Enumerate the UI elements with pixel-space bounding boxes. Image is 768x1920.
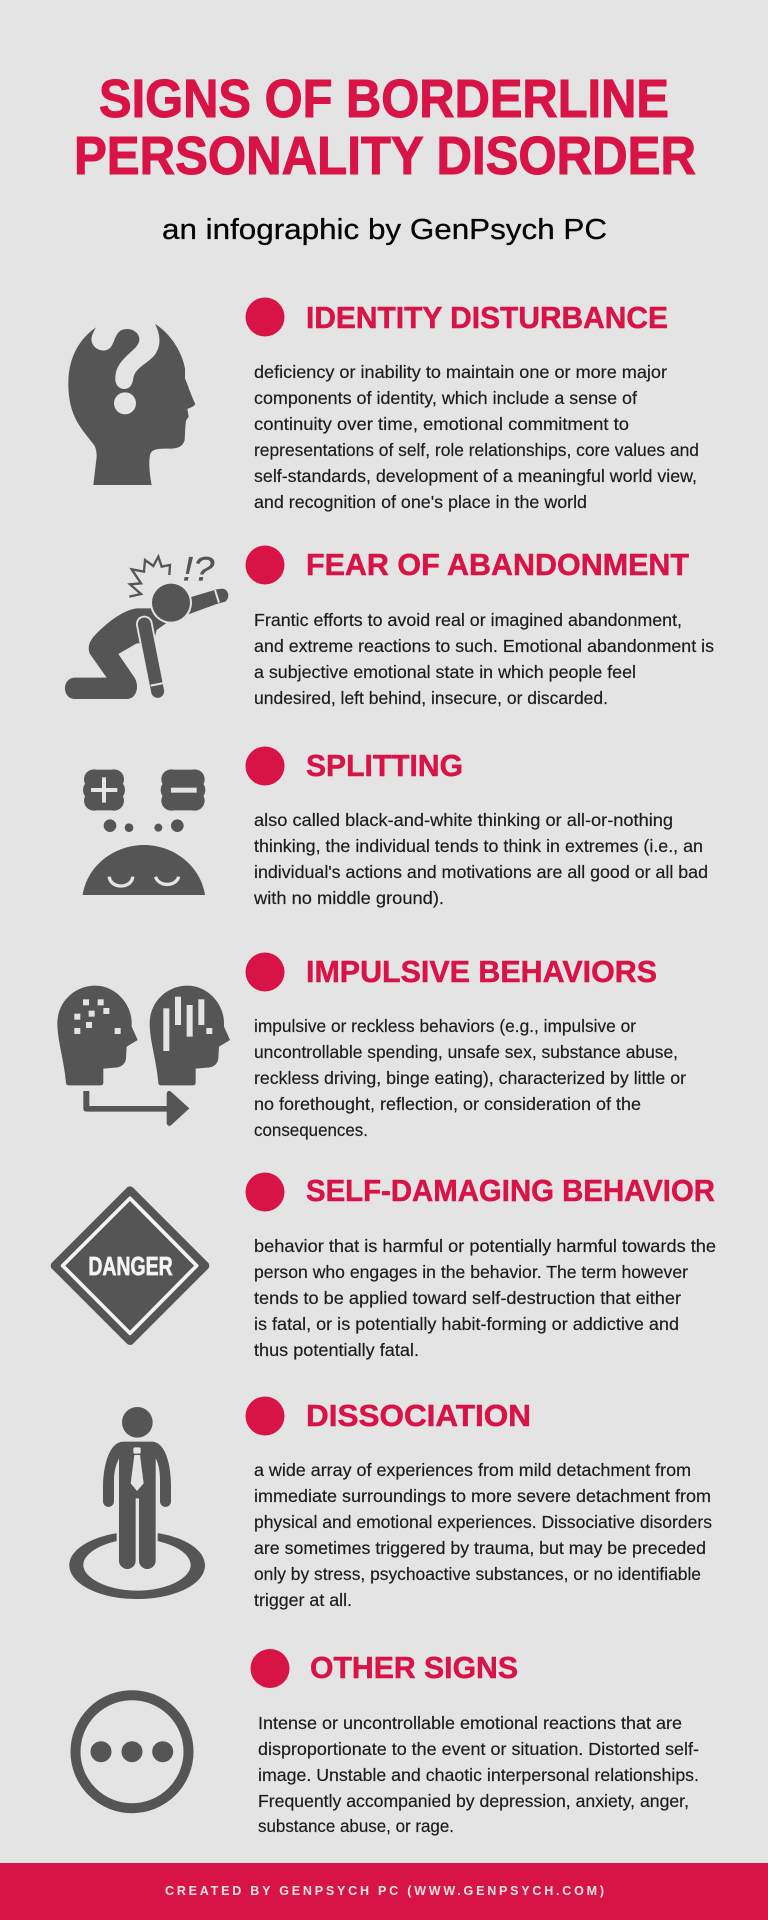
body text: physical and emotional experiences. Dissociative disorders xyxy=(254,1512,712,1532)
icon: kneeling figure: !? xyxy=(183,551,215,589)
body text xyxy=(254,610,714,708)
body text: behavior that is harmful or potentially harmful towards the xyxy=(254,1236,716,1256)
body text: Intense or uncontrollable emotional reactions that are xyxy=(258,1713,682,1733)
body text: immediate surroundings to more severe detachment from xyxy=(254,1486,711,1506)
body text: only by stress, psychoactive substances, or no identifiable xyxy=(254,1564,701,1584)
panel: dissociation xyxy=(69,1396,712,1610)
circle bullet xyxy=(246,1396,284,1436)
panel: impulsive behaviors xyxy=(57,952,686,1140)
body text: impulsive or reckless behaviors (e.g., impulsive or xyxy=(254,1016,636,1036)
icon: head with question mark xyxy=(68,324,195,485)
title xyxy=(74,70,696,186)
icon: danger sign: DANGER xyxy=(88,1251,173,1281)
panel: splitting xyxy=(83,746,708,908)
footer band xyxy=(0,1863,768,1920)
icon: kneeling figure xyxy=(65,551,228,699)
body text: thinking, the individual tends to think in extremes (i.e., an xyxy=(254,836,703,856)
heading: IDENTITY DISTURBANCE xyxy=(306,300,668,335)
heading: SELF-DAMAGING BEHAVIOR xyxy=(306,1173,715,1208)
body text xyxy=(254,1016,686,1140)
circle bullet xyxy=(246,746,284,786)
body text: are sometimes triggered by trauma, but may be preceded xyxy=(254,1538,706,1558)
title: SIGNS OF BORDERLINE xyxy=(99,70,669,129)
icon: danger sign xyxy=(55,1191,205,1341)
circle bullet xyxy=(250,1649,290,1688)
panel: self-damaging behavior xyxy=(55,1172,716,1360)
body text xyxy=(258,1713,699,1836)
icon: plus and minus thoughts over a sleeping head xyxy=(83,769,205,895)
heading: FEAR OF ABANDONMENT xyxy=(306,547,689,582)
body text: tends to be applied toward self-destruction that either xyxy=(254,1288,681,1308)
body text: disproportionate to the event or situation. Distorted self- xyxy=(258,1739,699,1759)
icon: two heads with arrow xyxy=(57,986,230,1126)
body text: thus potentially fatal. xyxy=(254,1340,419,1360)
body text: individual's actions and motivations are all good or all bad xyxy=(254,862,708,882)
icon: circle with three dots xyxy=(76,1695,188,1808)
body text: is fatal, or is potentially habit-forming or addictive and xyxy=(254,1314,679,1334)
heading: OTHER SIGNS xyxy=(310,1650,518,1685)
title: PERSONALITY DISORDER xyxy=(74,127,696,186)
body text: Frantic efforts to avoid real or imagined abandonment, xyxy=(254,610,682,630)
body text xyxy=(254,1460,712,1610)
body text: components of identity, which include a sense of xyxy=(254,388,637,408)
panel: other signs xyxy=(76,1649,699,1836)
body text: image. Unstable and chaotic interpersonal relationships. xyxy=(258,1765,699,1785)
body text: no forethought, reflection, or consideration of the xyxy=(254,1094,641,1114)
body text: deficiency or inability to maintain one or more major xyxy=(254,362,667,382)
body text: substance abuse, or rage. xyxy=(258,1816,454,1836)
footer credit: CREATED BY GENPSYCH PC (WWW.GENPSYCH.COM) xyxy=(165,1884,604,1898)
heading: DISSOCIATION xyxy=(306,1398,531,1433)
body text: a subjective emotional state in which people feel xyxy=(254,662,636,682)
body text: undesired, left behind, insecure, or discarded. xyxy=(254,688,608,708)
body text xyxy=(254,1236,716,1360)
body text: a wide array of experiences from mild detachment from xyxy=(254,1460,691,1480)
circle bullet xyxy=(246,546,284,584)
body text: trigger at all. xyxy=(254,1590,352,1610)
panel: identity disturbance xyxy=(68,298,699,512)
circle bullet xyxy=(246,298,284,336)
body text xyxy=(254,362,699,512)
circle bullet xyxy=(246,1172,284,1212)
body text: person who engages in the behavior. The term however xyxy=(254,1262,688,1282)
body text: and extreme reactions to such. Emotional abandonment is xyxy=(254,636,714,656)
body text: representations of self, role relationships, core values and xyxy=(254,440,699,460)
body text: consequences. xyxy=(254,1120,368,1140)
body text xyxy=(253,810,708,908)
body text: with no middle ground). xyxy=(253,888,444,908)
panel: fear of abandonment xyxy=(65,546,714,708)
body text: uncontrollable spending, unsafe sex, substance abuse, xyxy=(254,1042,678,1062)
icon: person standing in a ring xyxy=(69,1407,205,1599)
heading: IMPULSIVE BEHAVIORS xyxy=(306,954,657,989)
body text: Frequently accompanied by depression, anxiety, anger, xyxy=(258,1791,689,1811)
body text: self-standards, development of a meaningful world view, xyxy=(254,466,697,486)
body text: and recognition of one's place in the world xyxy=(254,492,587,512)
circle bullet xyxy=(246,952,284,992)
body text: continuity over time, emotional commitment to xyxy=(254,414,629,434)
subtitle: an infographic by GenPsych PC xyxy=(162,214,607,246)
heading: SPLITTING xyxy=(306,748,463,783)
body text: reckless driving, binge eating), characterized by little or xyxy=(254,1068,686,1088)
body text: also called black-and-white thinking or all-or-nothing xyxy=(254,810,673,830)
